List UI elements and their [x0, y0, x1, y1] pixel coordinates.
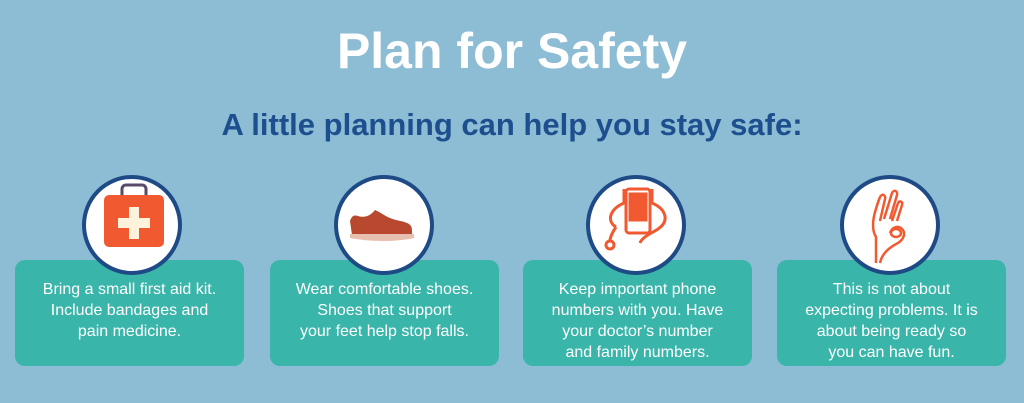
panel: phone numbers: your doctor’s number: [562, 323, 713, 340]
icon: ok hand: [840, 175, 940, 275]
panel: phone numbers: Keep important phone: [559, 281, 716, 298]
title: Plan for Safety: [337, 23, 687, 79]
panel: shoes: [270, 260, 499, 366]
panel: phone numbers: numbers with you. Have: [552, 302, 723, 319]
panel: shoes: Wear comfortable shoes.: [296, 281, 473, 298]
panel: have fun: about being ready so: [817, 323, 966, 340]
panel: phone numbers: [523, 260, 752, 366]
icon: shoe: [334, 175, 434, 275]
panel: first aid: Include bandages and: [51, 302, 208, 319]
panel: have fun: expecting problems. It is: [805, 302, 978, 319]
panel: have fun: This is not about: [833, 281, 950, 298]
panel: have fun: [777, 260, 1006, 366]
subtitle: A little planning can help you stay safe:: [221, 107, 803, 142]
panel: first aid: pain medicine.: [78, 323, 181, 340]
panel: first aid: [15, 260, 244, 366]
icon: first aid kit: [82, 175, 182, 275]
panel: phone numbers: and family numbers.: [565, 344, 710, 361]
panel: shoes: your feet help stop falls.: [300, 323, 469, 340]
panel: first aid: Bring a small first aid kit.: [43, 281, 216, 298]
icon: phone with stethoscope: [586, 175, 686, 275]
panel: shoes: Shoes that support: [317, 302, 452, 319]
panel: have fun: you can have fun.: [828, 344, 955, 361]
